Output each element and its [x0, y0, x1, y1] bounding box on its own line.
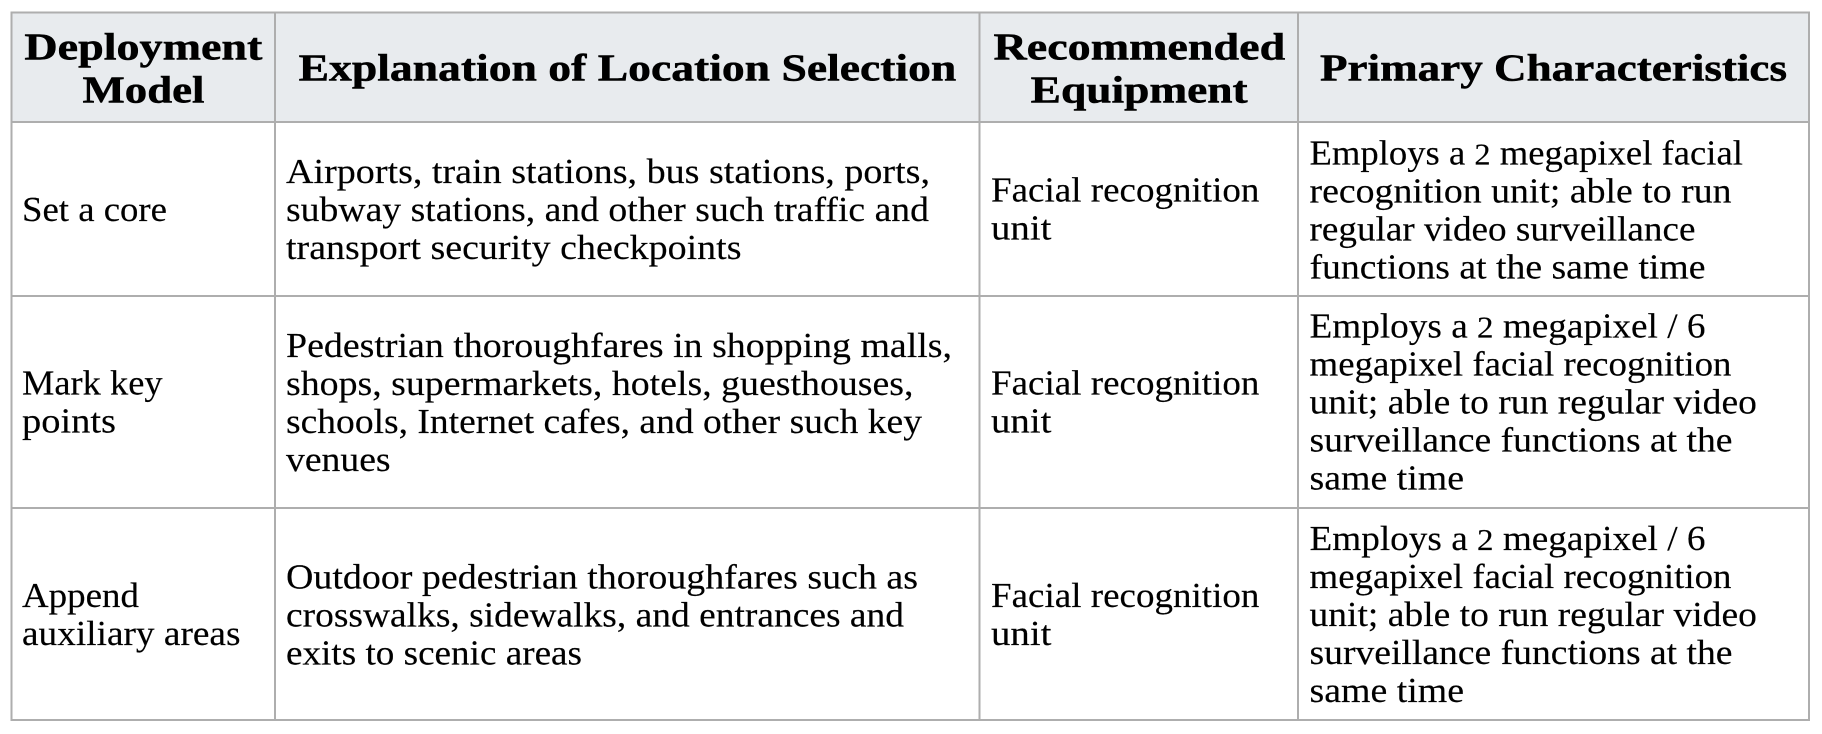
table header background [12, 12, 1809, 122]
row 1 deployment model: Set a core [22, 190, 167, 229]
row 2 deployment model [22, 364, 163, 440]
row 3 location explanation: crosswalks, sidewalks, and entrances and [286, 596, 905, 634]
heading: Deployment Model: Model [82, 70, 205, 112]
row 1 recommended equipment: unit [991, 209, 1052, 248]
row 3 primary characteristics: Employs a 2 megapixel / 6 [1310, 519, 1706, 558]
row 3 deployment model: auxiliary areas [22, 614, 240, 653]
row 1 primary characteristics [1310, 134, 1743, 286]
row 3 location explanation: Outdoor pedestrian thoroughfares such as [286, 558, 918, 596]
row 2 primary characteristics [1310, 306, 1757, 498]
row 2 primary characteristics: same time [1310, 458, 1464, 498]
row 1 location explanation: transport security checkpoints [286, 228, 742, 267]
row 2 location explanation: schools, Internet cafes, and other such key [286, 402, 923, 441]
row 3 recommended equipment: Facial recognition [991, 576, 1259, 615]
heading: Deployment Model: Deployment [24, 26, 263, 68]
row 3 primary characteristics: surveillance functions at the [1310, 633, 1732, 672]
heading: Recommended Equipment: Equipment [1031, 70, 1248, 112]
row 3 location explanation: exits to scenic areas [286, 634, 582, 672]
row 1 primary characteristics: recognition unit; able to run [1310, 172, 1732, 210]
row 1 recommended equipment [991, 171, 1259, 248]
row 2 location explanation: Pedestrian thoroughfares in shopping malls, [286, 326, 952, 365]
row 2 location explanation [286, 326, 952, 479]
row 3 deployment model [22, 576, 240, 653]
row 2 location explanation: venues [286, 440, 391, 479]
row 2 primary characteristics: unit; able to run regular video [1310, 382, 1757, 422]
row 2 primary characteristics: surveillance functions at the [1310, 420, 1732, 460]
heading: Explanation of Location Selection: Explanation of Location Selection [299, 48, 956, 90]
row 3 deployment model: Append [22, 576, 140, 615]
row 1 location explanation: subway stations, and other such traffic and [286, 190, 930, 229]
row 2 recommended equipment [991, 364, 1259, 440]
row 2 location explanation: shops, supermarkets, hotels, guesthouses, [286, 364, 914, 403]
row 3 location explanation [286, 558, 918, 672]
row 1 location explanation: Airports, train stations, bus stations, ports, [286, 152, 930, 191]
row 1 recommended equipment: Facial recognition [991, 171, 1259, 210]
row 2 primary characteristics: Employs a 2 megapixel / 6 [1310, 306, 1706, 346]
row 2 deployment model: Mark key [22, 364, 163, 402]
row 3 primary characteristics: unit; able to run regular video [1310, 595, 1757, 634]
row 2 recommended equipment: Facial recognition [991, 364, 1259, 402]
row 1 primary characteristics: Employs a 2 megapixel facial [1310, 134, 1743, 172]
heading: Deployment Model [24, 26, 263, 112]
heading: Recommended Equipment: Recommended [994, 26, 1285, 68]
row 3 primary characteristics: same time [1310, 671, 1464, 710]
row 2 primary characteristics: megapixel facial recognition [1310, 344, 1732, 384]
row 3 primary characteristics [1310, 519, 1757, 710]
row 2 recommended equipment: unit [991, 402, 1052, 440]
row 2 deployment model: points [22, 402, 116, 440]
row 1 primary characteristics: regular video surveillance [1310, 210, 1696, 248]
heading: Primary Characteristics: Primary Characteristics [1320, 48, 1787, 90]
heading: Recommended Equipment [994, 26, 1285, 112]
row 3 primary characteristics: megapixel facial recognition [1310, 557, 1732, 596]
row 3 recommended equipment [991, 576, 1259, 653]
row 3 recommended equipment: unit [991, 614, 1052, 653]
row 1 primary characteristics: functions at the same time [1310, 248, 1706, 286]
row 1 location explanation [286, 152, 930, 267]
